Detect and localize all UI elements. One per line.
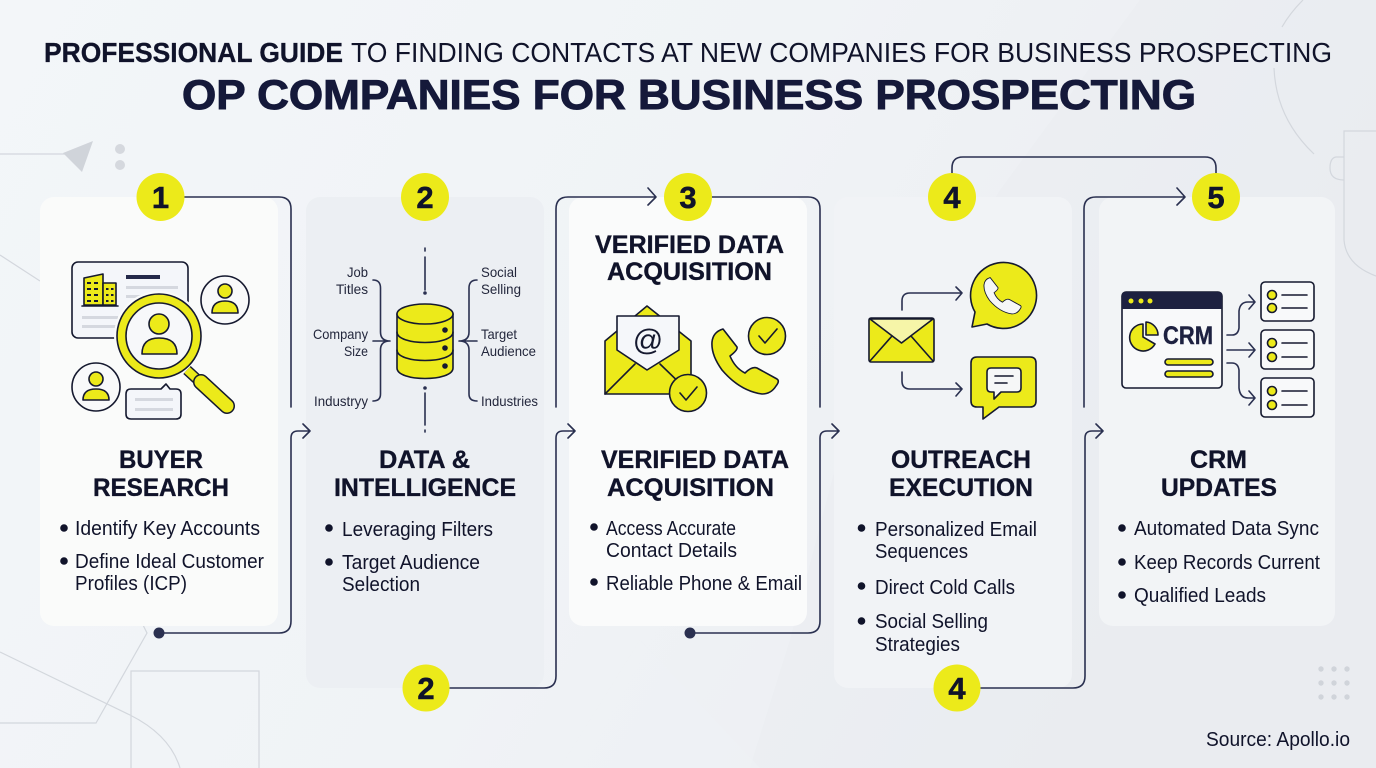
bullet list: Profiles (ICP): [75, 573, 187, 595]
icon: email and phone verified: [605, 306, 786, 412]
icon: database with filters: Industryy: [314, 393, 368, 409]
icon: database with filters: [313, 248, 538, 432]
icon: database with filters: Social: [481, 264, 517, 280]
icon: database with filters: Job: [347, 264, 368, 280]
icon: crm window with synced records: CRM: [1163, 322, 1213, 350]
badge: step 1: 1: [152, 180, 169, 215]
heading: lower verified data acquisition: [601, 446, 789, 502]
heading: crm updates: [1161, 446, 1277, 502]
bullet list: Contact Details: [606, 540, 737, 562]
title: [44, 37, 1332, 118]
badge: lower step 4: 4: [948, 671, 966, 706]
bullet list: [858, 519, 1037, 656]
heading: buyer research: [93, 446, 229, 502]
heading: data and intelligence: INTELLIGENCE: [334, 474, 516, 502]
heading: upper verified data acquisition: [595, 231, 784, 286]
icon: database with filters: Titles: [336, 281, 368, 297]
bullet list: Selection: [342, 574, 420, 596]
arrow: step 2 to step 3: [450, 188, 656, 688]
title line one: TO FINDING CONTACTS AT NEW COMPANIES FOR BUSINESS PROSPECTING: [351, 37, 1332, 68]
arrow: step 3 to step 4: [684, 197, 839, 638]
heading: data and intelligence: [334, 446, 516, 502]
icon: magnifier over contacts: [72, 262, 249, 419]
heading: outreach execution: [889, 446, 1033, 502]
heading: crm updates: CRM: [1190, 446, 1247, 474]
bullet list: [325, 519, 493, 596]
icon: database with filters: Size: [344, 343, 368, 359]
badge: step 5: 5: [1207, 180, 1225, 215]
heading: buyer research: RESEARCH: [93, 474, 229, 502]
panel: buyer research: [40, 197, 278, 626]
bullet list: [60, 518, 264, 595]
bullet list: [590, 518, 802, 595]
badge: step 4: 4: [943, 180, 961, 215]
badge: step 2: 2: [416, 180, 434, 215]
icon: email and phone verified: @: [633, 324, 663, 357]
heading: crm updates: UPDATES: [1161, 474, 1277, 502]
panel: crm updates: [1099, 197, 1335, 626]
arrow: step 1 to step 2: [154, 197, 310, 638]
bullet list: Keep Records Current: [1134, 552, 1320, 574]
bullet list: Social Selling: [875, 611, 988, 633]
badge: lower step 4: [934, 664, 980, 712]
panel: outreach execution: [834, 197, 1072, 688]
heading: upper verified data acquisition: ACQUISITION: [607, 258, 772, 286]
icon: database with filters: Company: [313, 326, 368, 342]
badge: step 3: [664, 173, 712, 221]
badge: step 3: 3: [679, 180, 697, 215]
heading: lower verified data acquisition: ACQUISITION: [607, 474, 774, 502]
badge: step 1: [136, 173, 184, 221]
badge: lower step 2: [402, 664, 450, 712]
badge: step 2: [401, 173, 449, 221]
source note: Source: Apollo.io: [1206, 729, 1350, 751]
icon: database with filters: Audience: [481, 343, 536, 359]
panel: data and intelligence: [306, 197, 544, 688]
icon: database with filters: Target: [481, 326, 517, 342]
bullet list: Qualified Leads: [1134, 585, 1266, 607]
bullet list: Leveraging Filters: [342, 519, 493, 541]
heading: lower verified data acquisition: VERIFIED DATA: [601, 446, 789, 474]
title line one: PROFESSIONAL GUIDE: [44, 37, 343, 68]
heading: buyer research: BUYER: [119, 446, 203, 474]
bullet list: Automated Data Sync: [1134, 518, 1319, 540]
icon: database with filters: Selling: [481, 281, 521, 297]
heading: data and intelligence: DATA &: [379, 446, 470, 474]
badge: step 4: [928, 173, 976, 221]
badge: lower step 2: 2: [417, 671, 435, 706]
heading: upper verified data acquisition: VERIFIED DATA: [595, 231, 784, 259]
bullet list: Sequences: [875, 541, 968, 563]
icon: database with filters: Industries: [481, 393, 538, 409]
bullet list: [1118, 518, 1320, 607]
panel: verified data acquisition: [569, 197, 807, 626]
heading: outreach execution: OUTREACH: [891, 446, 1031, 474]
title line two: OP COMPANIES FOR BUSINESS PROSPECTING: [182, 71, 1196, 118]
bullet list: Define Ideal Customer: [75, 551, 264, 573]
icon: email to call and message: [869, 262, 1037, 419]
bullet list: Reliable Phone & Email: [606, 573, 802, 595]
bullet list: Identify Key Accounts: [75, 518, 260, 540]
bullet list: Access Accurate: [606, 518, 736, 540]
bullet list: Direct Cold Calls: [875, 577, 1015, 599]
bullet list: Personalized Email: [875, 519, 1037, 541]
badge: step 5: [1192, 173, 1240, 221]
arrow: step 4 to step 5: [952, 157, 1216, 688]
bullet list: Target Audience: [342, 552, 480, 574]
heading: outreach execution: EXECUTION: [889, 474, 1033, 502]
bullet list: Strategies: [875, 634, 960, 656]
icon: crm window with synced records: [1122, 282, 1314, 417]
